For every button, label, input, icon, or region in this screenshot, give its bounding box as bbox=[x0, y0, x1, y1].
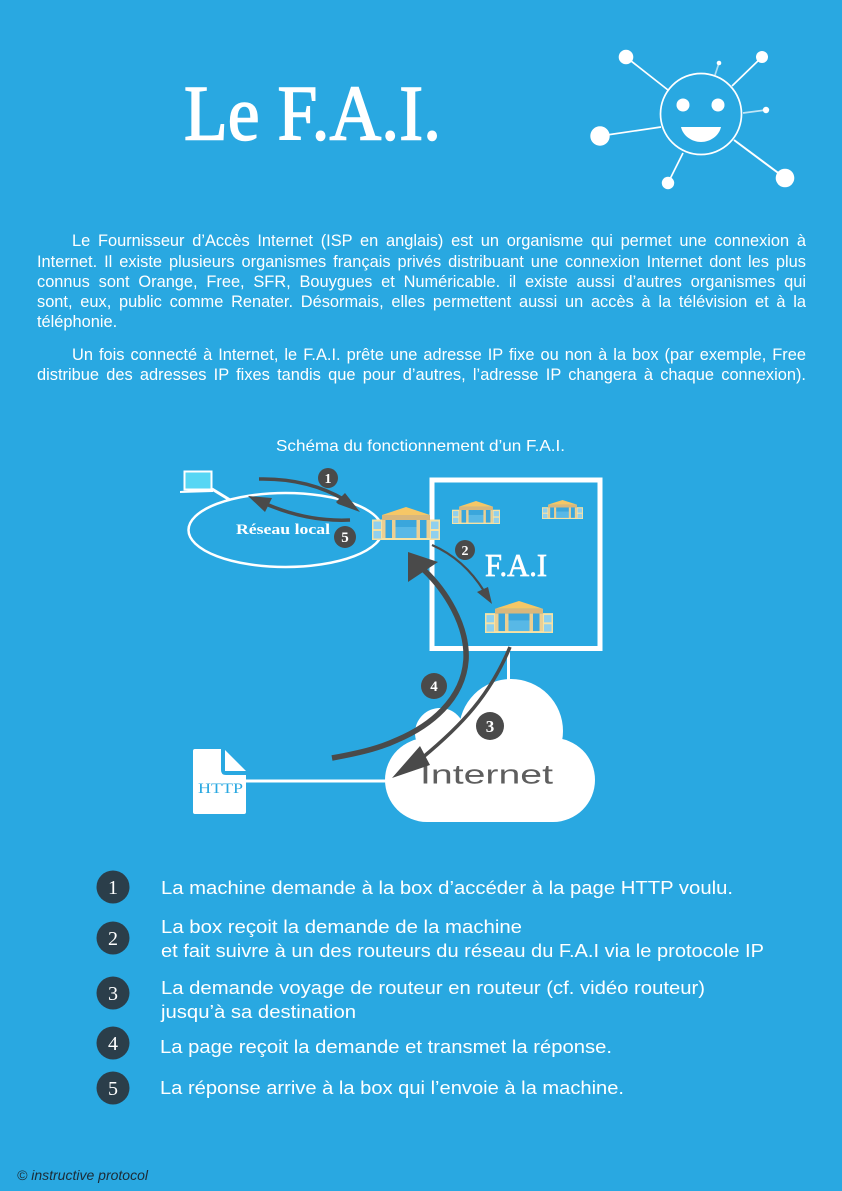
legend item 2: 2 bbox=[108, 928, 118, 950]
arrow 3 bbox=[392, 647, 510, 778]
cloud: Internet bbox=[385, 679, 595, 822]
arrow 1 bbox=[259, 479, 360, 512]
text block: introduction bbox=[37, 232, 806, 384]
F.A.I. box: F.A.I bbox=[485, 547, 547, 583]
legend bbox=[96, 870, 764, 1104]
step markers on diagram: 4 bbox=[430, 679, 438, 695]
legend item 2: La box reçoit la demande de la machine bbox=[161, 917, 522, 937]
legend item 1 bbox=[96, 870, 733, 904]
footer credit: © instructive protocol bbox=[17, 1167, 149, 1183]
legend item 2: et fait suivre à un des routeurs du réseau du F.A.I via le protocole IP bbox=[161, 941, 764, 961]
local network ellipse bbox=[188, 493, 382, 567]
legend item 1: 1 bbox=[108, 877, 118, 899]
title: Le F.A.I. bbox=[184, 70, 441, 156]
step markers on diagram: 5 bbox=[341, 530, 349, 546]
legend item 5: 5 bbox=[108, 1078, 118, 1100]
legend item 4 bbox=[96, 1026, 612, 1060]
legend item 3: jusqu’à sa destination bbox=[160, 1002, 356, 1022]
legend item 2 bbox=[96, 917, 764, 961]
legend item 4: La page reçoit la demande et transmet la réponse. bbox=[160, 1037, 612, 1057]
legend item 3: La demande voyage de routeur en routeur (cf. vidéo routeur) bbox=[161, 978, 705, 998]
legend item 5: La réponse arrive à la box qui l’envoie à la machine. bbox=[160, 1078, 624, 1098]
text block: introduction: distribue des adresses IP fixes tandis que pour d’autres, l’adresse IP changera à chaque connexion). bbox=[37, 366, 806, 384]
cloud: Internet: Internet bbox=[420, 760, 554, 790]
http connector bbox=[246, 780, 386, 782]
text block: introduction: Le Fournisseur d’Accès Internet (ISP en anglais) est un organisme qui permet une connexion à bbox=[72, 232, 806, 250]
local network ellipse: Réseau local bbox=[236, 522, 330, 538]
step markers on diagram bbox=[318, 468, 504, 740]
legend item 5 bbox=[96, 1072, 624, 1104]
cloud connector bbox=[507, 650, 510, 682]
legend item 3: 3 bbox=[108, 983, 118, 1005]
caption: Schéma du fonctionnement d’un F.A.I. bbox=[276, 438, 565, 455]
legend item 1: La machine demande à la box d’accéder à la page HTTP voulu. bbox=[161, 878, 733, 898]
routers bbox=[372, 500, 583, 633]
text block: introduction: Un fois connecté à Internet, le F.A.I. prête une adresse IP fixe ou non à la box (par exemple, Free bbox=[72, 346, 806, 364]
text block: introduction: Internet. Il existe plusieurs organismes français privés distribuant une connexion Internet dont les plus bbox=[37, 253, 806, 271]
step markers on diagram: 3 bbox=[486, 717, 494, 736]
legend item 4: 4 bbox=[108, 1033, 118, 1055]
text block: introduction: connus sont Orange, Free, SFR, Bouygues et Numéricable. il existe aussi d’autres organismes qui bbox=[37, 273, 806, 291]
icon: HTTP document: HTTP bbox=[198, 781, 243, 797]
icon: HTTP document bbox=[193, 749, 246, 814]
icon: smiley network bbox=[590, 50, 794, 190]
arrow 5 bbox=[248, 496, 350, 520]
F.A.I. box bbox=[432, 480, 600, 648]
text block: introduction: sont, eux, public comme Renater. Désormais, elles permettent aussi un accès à la télévision et à la bbox=[37, 293, 806, 311]
arrow 2 bbox=[432, 545, 492, 604]
arrow 4 bbox=[332, 552, 466, 758]
step markers on diagram: 1 bbox=[324, 472, 332, 487]
legend item 3 bbox=[96, 976, 705, 1022]
text block: introduction: téléphonie. bbox=[37, 313, 117, 331]
step markers on diagram: 2 bbox=[462, 544, 468, 559]
icon: laptop bbox=[180, 472, 230, 500]
